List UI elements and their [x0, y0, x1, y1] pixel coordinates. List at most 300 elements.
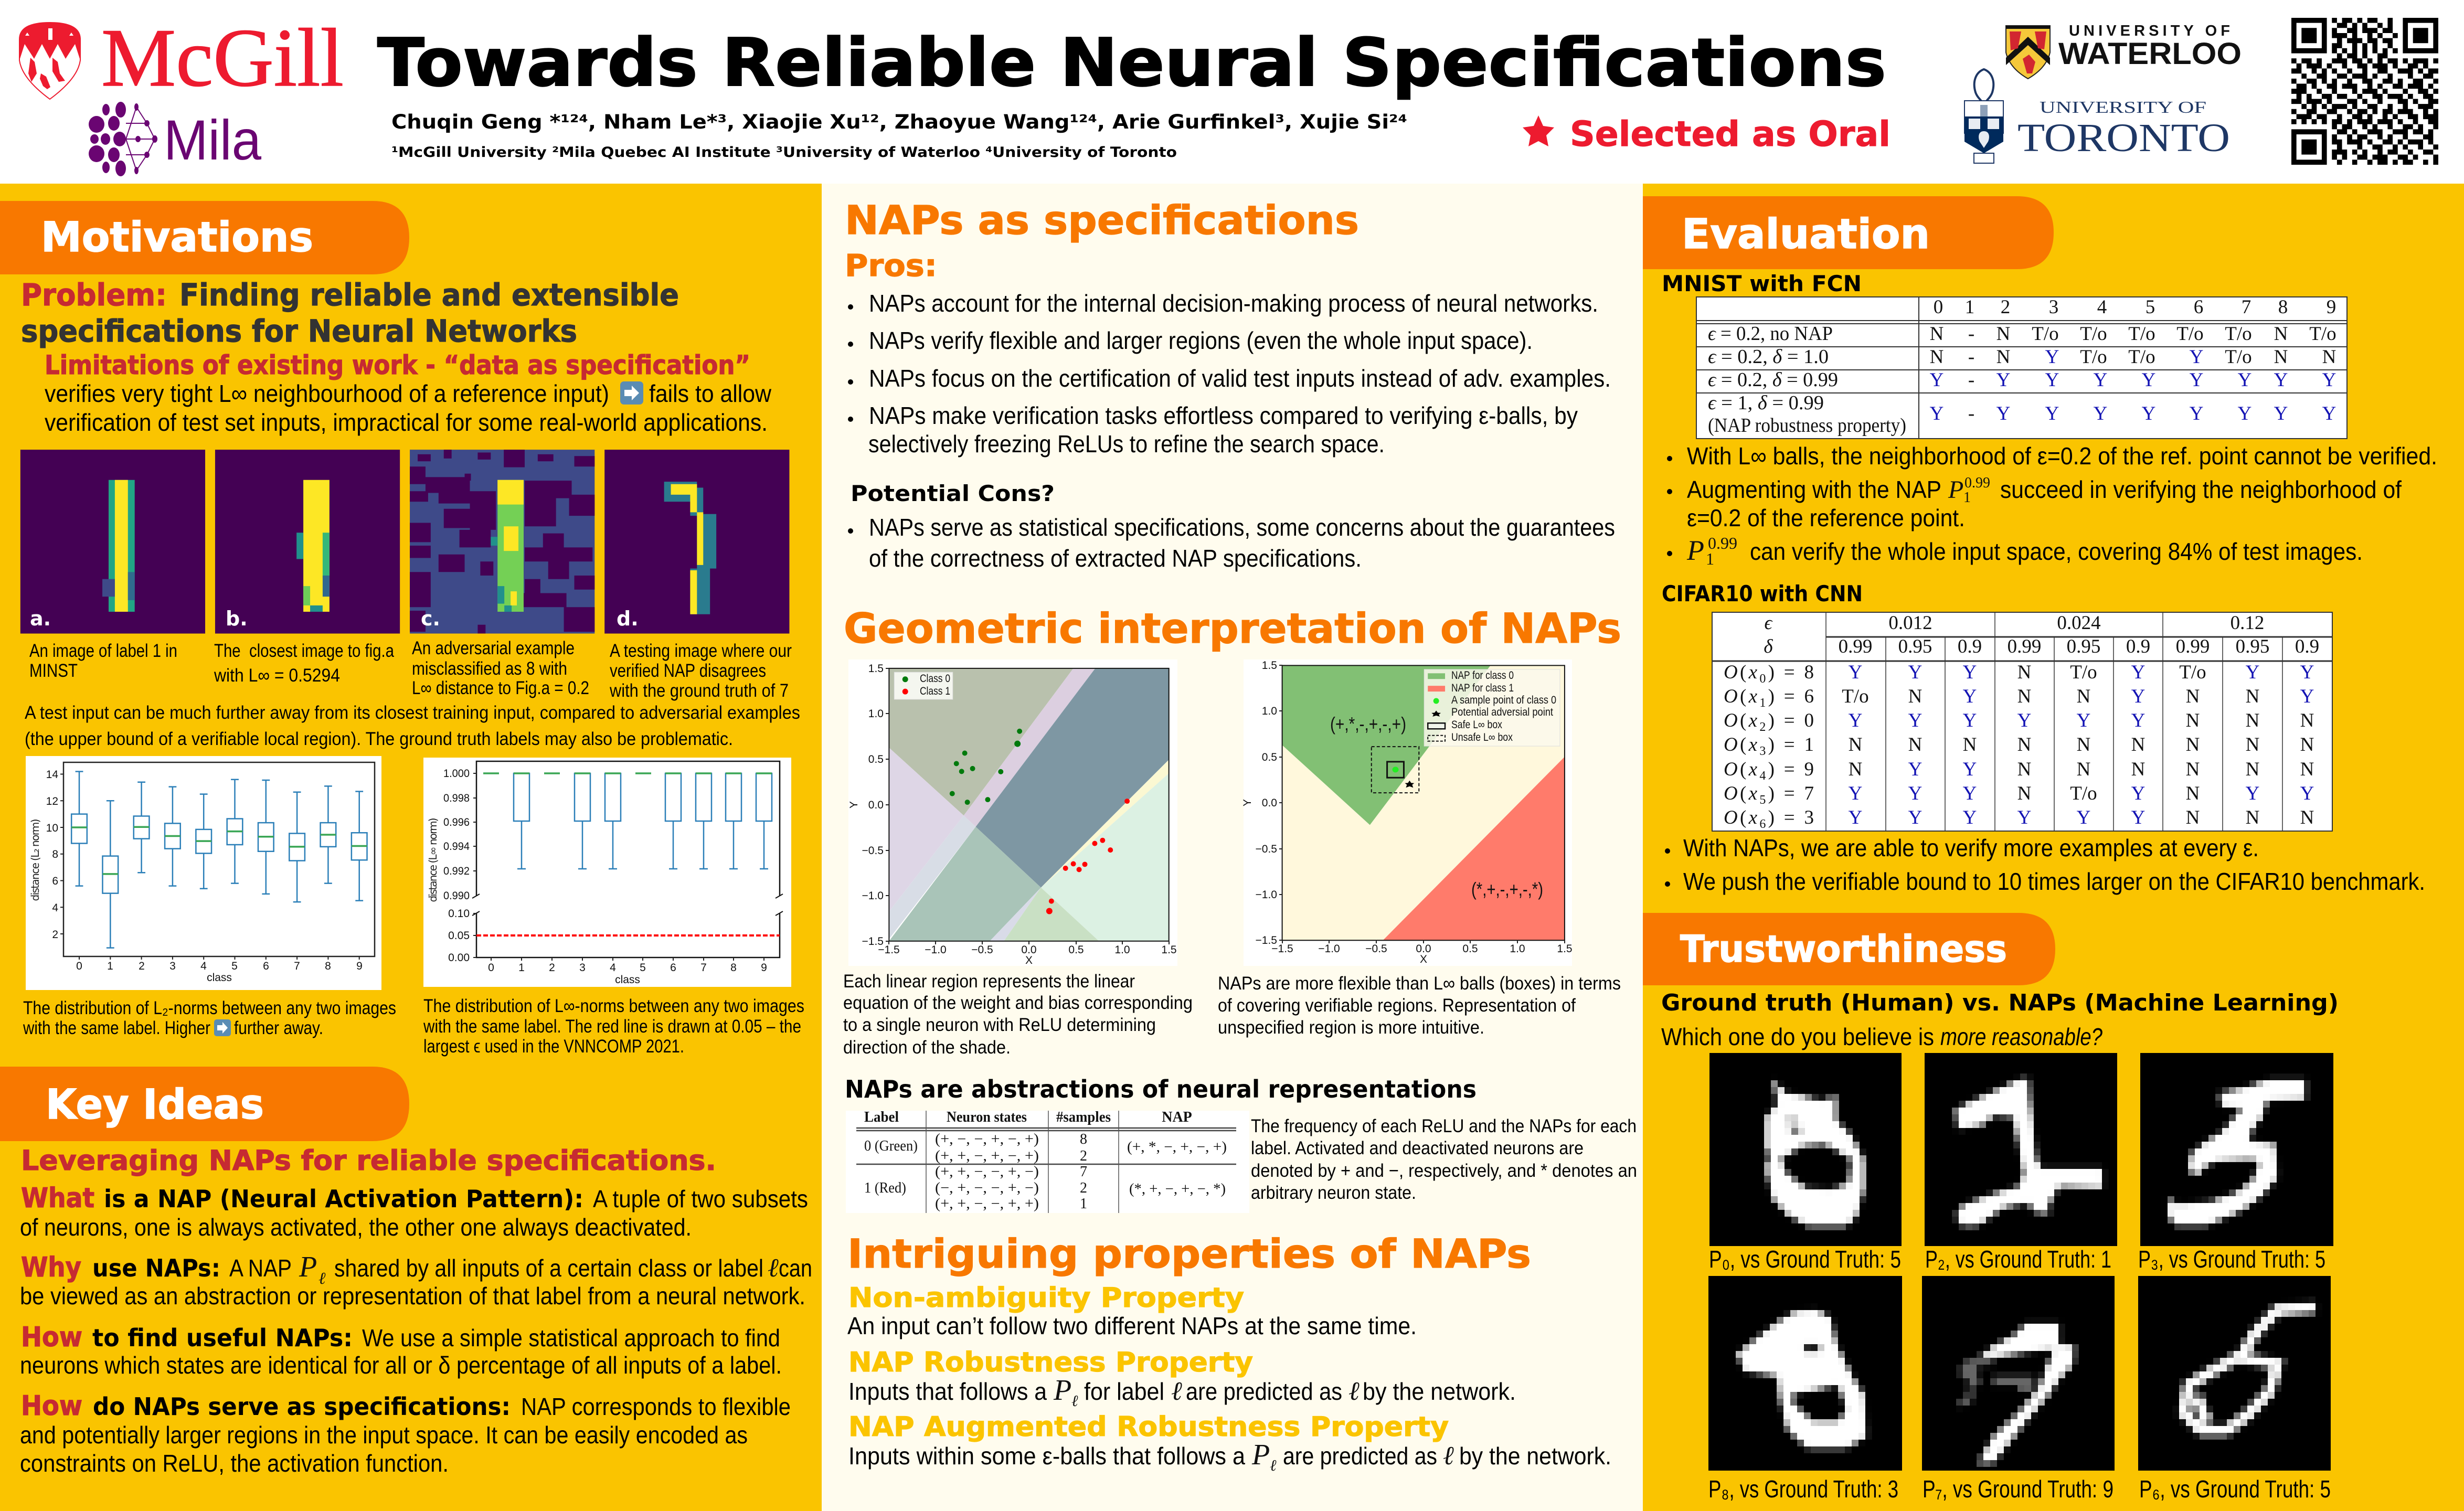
table: CIFAR10 results: O(x	[1724, 807, 1757, 828]
table: NAP frequency: #samples	[1056, 1109, 1111, 1125]
problem statement	[21, 277, 679, 349]
MNIST findings: P	[1948, 476, 1963, 504]
MNIST findings	[1667, 442, 2437, 568]
digit image: P8	[1708, 1276, 1902, 1501]
table: MNIST results: Y	[2238, 403, 2251, 424]
image b: closest training image: b.	[226, 607, 248, 630]
table: MNIST results: ϵ = 0.2, δ = 0.99	[1708, 369, 1838, 391]
table: CIFAR10 results: ϵ	[1765, 612, 1773, 634]
table: MNIST results: ϵ = 0.2, δ = 1.0	[1708, 346, 1829, 368]
logo: Waterloo: UNIVERSITY OF	[2069, 23, 2230, 39]
MNIST findings: ε=0.2 of the reference point.	[1687, 504, 1965, 531]
chart: linear regions plot: 1.0	[868, 708, 884, 720]
property: NAP augmented robustness: are predicted as	[1283, 1442, 1437, 1470]
chart: NAP regions vs boxes plot: −1.5	[1271, 943, 1293, 955]
heading bar: Key Ideas: Key Ideas	[46, 1081, 264, 1129]
table: MNIST results: Y	[2045, 369, 2059, 391]
chart: L2 norm box plot: 8	[52, 848, 58, 860]
problem statement: specifications for Neural Networks	[21, 313, 577, 349]
property: NAP robustness: are predicted as	[1186, 1378, 1342, 1405]
chart: L2 norm box plot: 2	[52, 929, 58, 941]
property: NAP robustness: ℓ	[1171, 1376, 1182, 1406]
table: CIFAR10 results: T/o	[1842, 686, 1869, 707]
table: CIFAR10 results: Y	[2131, 662, 2145, 683]
table: CIFAR10 results: 0.95	[2236, 636, 2269, 657]
captions for images a-d: with L∞ = 0.5294	[214, 665, 340, 686]
captions for images a-d: MINST	[29, 661, 78, 681]
table: CIFAR10 results: O(x	[1724, 783, 1757, 804]
table: CIFAR10 results: ) = 7	[1768, 783, 1814, 804]
chart: NAP regions vs boxes plot: −0.5	[1256, 843, 1277, 855]
chart: L-infinity norm box plot with broken axis: 0.992	[443, 865, 470, 877]
chart: L2 norm box plot: distance (L₂ norm)	[29, 818, 41, 901]
plot captions	[843, 971, 1621, 1058]
plot captions: direction of the shade.	[843, 1037, 1011, 1058]
digit image: P2: P₂, vs Ground Truth: 1	[1925, 1246, 2111, 1273]
why use NAPs	[20, 1251, 812, 1310]
property: NAP augmented robustness: ℓ	[1443, 1441, 1454, 1470]
chart: L-infinity norm box plot with broken axis: 9	[761, 962, 767, 974]
digit image: P7	[1922, 1276, 2115, 1501]
chart: linear regions plot: 1.5	[1161, 944, 1177, 956]
table: MNIST results: Y	[2274, 403, 2288, 424]
limitations text: fails to allow	[649, 380, 772, 407]
property: NAP robustness: P	[1053, 1374, 1071, 1407]
table: CIFAR10 results: N	[2186, 686, 2200, 707]
chart: NAP regions vs boxes plot: (*,+,-,+,-,*)	[1471, 878, 1543, 900]
logo: Mila: Mila	[164, 108, 262, 172]
table: CIFAR10 results: N	[2186, 783, 2200, 804]
chart: L2 norm box plot: 8	[325, 960, 331, 972]
table: CIFAR10 results: N	[2131, 734, 2145, 756]
how to find useful NAPs	[20, 1322, 782, 1379]
chart: linear regions plot: 0.0	[868, 799, 884, 811]
chart: linear regions plot: 0.5	[1068, 944, 1084, 956]
table: CIFAR10 results: N	[2017, 759, 2031, 780]
table: CIFAR10 results: N	[1849, 734, 1862, 756]
heading bar: Trustworthiness: Trustworthiness	[1680, 928, 2007, 971]
why use NAPs: can	[779, 1254, 812, 1282]
pros bullet list: NAPs focus on the certification of valid test inputs instead of adv. examples.	[869, 365, 1611, 392]
property: NAP robustness: by the network.	[1363, 1378, 1516, 1405]
table: NAP frequency: (+, *, −, +, −, +)	[1127, 1139, 1227, 1155]
chart captions: further away.	[234, 1018, 323, 1038]
chart: linear regions plot: Class 0	[920, 673, 950, 685]
what is a NAP: What	[21, 1183, 94, 1214]
table: MNIST results: Y	[2190, 403, 2203, 424]
table: NAP frequency: 8	[1080, 1131, 1087, 1147]
heading: NAPs are abstractions: NAPs are abstractions of neural representations	[845, 1075, 1477, 1103]
table: CIFAR10 results: Y	[1849, 807, 1862, 828]
table: MNIST results: Y	[1930, 403, 1943, 424]
chart: L2 norm box plot: 2	[139, 960, 145, 972]
logo: Toronto: TORONTO	[2017, 116, 2230, 160]
table: MNIST results: ϵ = 0.2, no NAP	[1708, 323, 1833, 345]
table: CIFAR10 results: N	[2246, 807, 2259, 828]
table: CIFAR10 results: Y	[2131, 783, 2145, 804]
table: MNIST results: N	[1930, 323, 1943, 345]
panel: NAPs as specifications	[822, 184, 1643, 1511]
QR code	[2291, 18, 2438, 165]
table: CIFAR10 results: T/o	[2070, 783, 2097, 804]
table: CIFAR10 results: N	[2300, 710, 2314, 731]
MNIST findings: P	[1686, 535, 1704, 566]
chart: L-infinity norm box plot with broken axis: 0.996	[443, 816, 470, 828]
property: NAP robustness	[848, 1347, 1516, 1410]
chart: NAP regions vs boxes plot: −1.0	[1318, 943, 1340, 955]
chart: linear regions plot: 0.0	[1021, 944, 1037, 956]
logo: Waterloo	[2006, 23, 2242, 79]
table: CIFAR10 results: ) = 0	[1768, 710, 1814, 731]
table: CIFAR10 results: δ	[1764, 636, 1773, 657]
property: NAP augmented robustness: Inputs within some ε-balls that follows a	[848, 1442, 1245, 1470]
MNIST findings: succeed in verifying the neighborhood of	[2000, 476, 2402, 503]
table: MNIST results: N	[1930, 346, 1943, 368]
MNIST findings: 1	[1963, 490, 1971, 506]
chart: L-infinity norm box plot with broken axis: distance (L∞ norm)	[427, 817, 439, 902]
table: MNIST results: Y	[2322, 403, 2336, 424]
table: CIFAR10 results: 5	[1759, 793, 1766, 807]
chart: L-infinity norm box plot with broken axis: 1.000	[443, 768, 470, 780]
table: CIFAR10 results: Y	[1963, 686, 1977, 707]
logo: Toronto: UNIVERSITY OF	[2040, 98, 2206, 116]
table: CIFAR10 results: Y	[2017, 710, 2031, 731]
table: MNIST results: Y	[2142, 403, 2155, 424]
table: CIFAR10 results: N	[2017, 686, 2031, 707]
table: CIFAR10 results: 0.9	[2295, 636, 2319, 657]
table: MNIST results: (NAP robustness property)	[1708, 414, 1906, 437]
chart: L2 norm box plot: 10	[46, 822, 58, 834]
table: CIFAR10 results: N	[2246, 710, 2259, 731]
MNIST findings: 0.99	[1708, 534, 1737, 552]
chart: L2 norm box plot: 6	[263, 960, 269, 972]
table: MNIST results: Y	[2045, 346, 2059, 368]
subheading: ground truth vs NAPs: Ground truth (Human) vs. NAPs (Machine Learning)	[1661, 989, 2339, 1016]
table: CIFAR10 results: Y	[1963, 710, 1977, 731]
heading bar: Motivations	[0, 201, 409, 274]
table: MNIST results: 9	[2327, 296, 2336, 318]
how do NAPs serve as specifications: constraints on ReLU, the activation function.	[20, 1450, 449, 1477]
table: MNIST results: Y	[2142, 369, 2155, 391]
table: NAP frequency: (+, +, −, −, +, −)	[935, 1164, 1039, 1180]
table: CIFAR10 results: Y	[2017, 807, 2031, 828]
image c: adversarial example	[410, 450, 594, 634]
table: CIFAR10 results: 0.12	[2231, 612, 2264, 634]
table: NAP frequency: 2	[1080, 1148, 1087, 1164]
digit image: P3	[2140, 1053, 2333, 1271]
chart: L2 norm box plot: 7	[294, 960, 300, 972]
chart: L2 norm box plot: 1	[107, 960, 113, 972]
chart: L-infinity norm box plot with broken axis: 2	[549, 962, 555, 974]
table: MNIST results: Y	[2045, 403, 2059, 424]
table: CIFAR10 results: 0.95	[1898, 636, 1932, 657]
table: CIFAR10 results: Y	[2246, 662, 2259, 683]
MNIST findings: can verify the whole input space, covering 84% of test images.	[1750, 538, 2363, 565]
table: CIFAR10 results: N	[2186, 807, 2200, 828]
captions for images a-d: An adversarial example	[412, 638, 575, 658]
limitations text: verification of test set inputs, impractical for some real-world applications.	[45, 409, 768, 436]
plot captions: to a single neuron with ReLU determining	[843, 1015, 1156, 1035]
chart: linear regions plot: −1.5	[862, 935, 884, 948]
table: CIFAR10 results: 0.9	[2126, 636, 2150, 657]
authors: Chuqin Geng *¹²⁴, Nham Le*³, Xiaojie Xu¹², Zhaoyue Wang¹²⁴, Arie Gurfinkel³, Xujie Si²⁴	[391, 111, 1407, 133]
table: MNIST results: T/o	[2080, 346, 2107, 368]
digit image: P0: P₀, vs Ground Truth: 5	[1709, 1246, 1901, 1273]
captions for images a-d	[29, 638, 792, 701]
chart: NAP regions vs boxes plot: A sample point of class 0	[1451, 694, 1556, 706]
table: CIFAR10 results: N	[2017, 734, 2031, 756]
table: MNIST results: 3	[2049, 296, 2058, 318]
logo: Mila	[89, 102, 262, 176]
chart captions	[23, 996, 804, 1057]
table: MNIST results: Y	[2238, 369, 2251, 391]
table: NAP frequency	[846, 1109, 1249, 1213]
table: CIFAR10 results: Y	[1963, 662, 1977, 683]
image a: MNIST digit 1: a.	[30, 607, 51, 630]
chart: NAP regions vs boxes plot: −1.5	[1256, 934, 1277, 946]
table: CIFAR10 results: N	[2131, 759, 2145, 780]
table: MNIST results: T/o	[2225, 346, 2252, 368]
chart: NAP regions vs boxes plot: NAP for class 0	[1451, 669, 1514, 682]
image a: MNIST digit 1	[20, 450, 205, 634]
table: CIFAR10 results: 0.95	[2067, 636, 2100, 657]
heading: CIFAR10 with CNN: CIFAR10 with CNN	[1662, 581, 1863, 606]
table: MNIST results: Y	[2094, 403, 2107, 424]
table: CIFAR10 results: 2	[1759, 720, 1766, 734]
table: CIFAR10 results: N	[2077, 686, 2090, 707]
table: CIFAR10 results: Y	[2246, 783, 2259, 804]
chart: NAP regions vs boxes plot: 1.0	[1510, 943, 1525, 955]
table: MNIST results: -	[1968, 323, 1974, 345]
table: NAP frequency: 0 (Green)	[864, 1138, 918, 1154]
image d: hooked digit 7	[604, 450, 789, 634]
chart: linear regions plot	[848, 659, 1177, 966]
logo: Waterloo: WATERLOO	[2058, 37, 2242, 71]
chart captions: with the same label. Higher	[23, 1018, 210, 1038]
chart: linear regions plot: Class 1	[920, 685, 950, 697]
why use NAPs: ℓ	[768, 1253, 779, 1282]
cons bullet	[848, 514, 1615, 572]
table description: denoted by + and −, respectively, and * denotes an	[1251, 1161, 1637, 1181]
property: non-ambiguity: An input can’t follow two different NAPs at the same time.	[847, 1312, 1417, 1339]
captions for images a-d: The closest image to fig.a	[214, 641, 394, 661]
icon: star	[1523, 115, 1554, 146]
heading: Potential Cons: Potential Cons?	[851, 481, 1055, 506]
chart: L2 norm box plot: 3	[169, 960, 176, 972]
MNIST findings: 1	[1706, 549, 1714, 568]
captions for images a-d: L∞ distance to Fig.a = 0.2	[412, 678, 589, 698]
chart: L2 norm box plot: 0	[76, 960, 82, 972]
table: CIFAR10 results: N	[2246, 734, 2259, 756]
table: CIFAR10 results: 1	[1759, 696, 1766, 710]
red reference line	[476, 934, 780, 937]
cons bullet: NAPs serve as statistical specifications, some concerns about the guarantees	[869, 514, 1615, 541]
table: MNIST results: 1	[1965, 296, 1974, 318]
table: CIFAR10 results: Y	[2300, 686, 2314, 707]
chart: L-infinity norm box plot with broken axis: 0.00	[448, 952, 470, 964]
captions for images a-d: with the ground truth of 7	[609, 680, 789, 701]
table: CIFAR10 results: N	[2017, 662, 2031, 683]
table: CIFAR10 results: Y	[2131, 807, 2145, 828]
digit image: P8: P₈, vs Ground Truth: 3	[1708, 1475, 1898, 1503]
table: CIFAR10 results: Y	[1849, 710, 1862, 731]
table: MNIST results: Y	[2190, 369, 2203, 391]
chart: NAP regions vs boxes plot: 1.5	[1262, 659, 1277, 672]
table: MNIST results: Y	[1996, 369, 2010, 391]
chart: NAP regions vs boxes plot	[1241, 659, 1573, 966]
table: CIFAR10 results: 3	[1759, 744, 1766, 758]
chart: NAP regions vs boxes plot: −1.0	[1256, 889, 1277, 901]
table: MNIST results: 6	[2194, 296, 2203, 318]
plot captions: equation of the weight and bias corresponding	[843, 993, 1193, 1013]
MNIST findings: 0.99	[1964, 475, 1990, 491]
chart: NAP regions vs boxes plot: −0.5	[1365, 943, 1387, 955]
pros bullet list: selectively freezing ReLUs to refine the search space.	[868, 430, 1385, 457]
title: Towards Reliable Neural Specifications	[377, 24, 1886, 101]
table: MNIST results: T/o	[2128, 323, 2155, 345]
key ideas subtitle: Leveraging NAPs for reliable specifications.	[21, 1145, 716, 1177]
property: NAP augmented robustness: ℓ	[1270, 1457, 1277, 1474]
chart: L2 norm box plot: 5	[231, 960, 238, 972]
table description: The frequency of each ReLU and the NAPs for each	[1251, 1116, 1637, 1136]
digit image: P6: P₆, vs Ground Truth: 5	[2139, 1475, 2331, 1503]
table: CIFAR10 results: Y	[2077, 710, 2090, 731]
chart: L2 norm box plot: 6	[52, 875, 58, 887]
table: CIFAR10 results: 0	[1759, 672, 1766, 686]
chart: NAP regions vs boxes plot: 1.0	[1262, 705, 1277, 717]
chart: L-infinity norm box plot with broken axis: 3	[579, 962, 586, 974]
table: CIFAR10 results: Y	[1908, 759, 1922, 780]
table: CIFAR10 results: 0.99	[1839, 636, 1872, 657]
table: MNIST results: Y	[1996, 403, 2010, 424]
table: NAP frequency: 1	[1080, 1196, 1087, 1212]
heading bar: Evaluation	[1643, 196, 2054, 269]
chart: L-infinity norm box plot with broken axis: 1	[518, 962, 525, 974]
chart: L2 norm box plot: 12	[46, 795, 58, 807]
table: MNIST results: Y	[2094, 369, 2107, 391]
chart: NAP regions vs boxes plot: Potential adversial point	[1451, 706, 1553, 718]
MNIST findings: Augmenting with the NAP	[1687, 476, 1941, 503]
table: MNIST results: T/o	[2309, 323, 2336, 345]
table: CIFAR10 results: Y	[1963, 783, 1977, 804]
table: CIFAR10 results: N	[2077, 759, 2090, 780]
panel: Key Ideas	[0, 1067, 822, 1511]
plot captions: Each linear region represents the linear	[843, 971, 1135, 992]
table: NAP frequency: Neuron states	[947, 1109, 1027, 1125]
table: MNIST results: 8	[2278, 296, 2288, 318]
chart: NAP regions vs boxes plot: 0.0	[1262, 797, 1277, 809]
explanatory text: (the upper bound of a verifiable local region). The ground truth labels may also be problematic.	[25, 729, 733, 749]
chart: NAP regions vs boxes plot: NAP for class 1	[1451, 682, 1514, 694]
problem statement: Finding reliable and extensible	[179, 277, 679, 313]
table: MNIST results: Y	[1930, 369, 1943, 391]
table: MNIST results: ϵ = 1, δ = 0.99	[1708, 392, 1824, 414]
chart: L-infinity norm box plot with broken axis: 0.998	[443, 792, 470, 804]
table: MNIST results: T/o	[2176, 323, 2204, 345]
table: NAP frequency: (+, +, −, −, +, +)	[935, 1196, 1039, 1212]
table: MNIST results: T/o	[2225, 323, 2252, 345]
property: NAP augmented robustness: by the network.	[1459, 1442, 1611, 1470]
chart: linear regions plot: 1.0	[1114, 944, 1130, 956]
chart captions: The distribution of L∞-norms between any two images	[423, 996, 804, 1016]
why use NAPs: Why	[21, 1252, 81, 1283]
table: CIFAR10 results: Y	[2077, 807, 2090, 828]
chart: linear regions plot: 1.5	[868, 663, 884, 675]
table: CIFAR10 results: N	[2300, 734, 2314, 756]
heading: Geometric interpretation: Geometric interpretation of NAPs	[844, 605, 1621, 653]
CIFAR10 findings	[1665, 834, 2425, 895]
chart: NAP regions vs boxes plot: X	[1420, 953, 1427, 965]
logo: McGill: McGill	[101, 12, 344, 104]
chart: NAP regions vs boxes plot: 0.5	[1262, 751, 1277, 763]
how to find useful NAPs: neurons which states are identical for all or δ percentage of all inputs of a label.	[20, 1352, 782, 1379]
table: CIFAR10 results: N	[2300, 807, 2314, 828]
chart: L-infinity norm box plot with broken axis: 8	[730, 962, 737, 974]
table: CIFAR10 results: Y	[1849, 662, 1862, 683]
cons bullet: of the correctness of extracted NAP specifications.	[869, 545, 1362, 572]
table: MNIST results: -	[1968, 403, 1974, 424]
question: more reasonable?	[1940, 1023, 2102, 1050]
property: non-ambiguity	[847, 1282, 1417, 1339]
chart: linear regions plot: X	[1025, 954, 1033, 966]
image b: closest training image	[215, 450, 400, 634]
digit image: P3: P₃, vs Ground Truth: 5	[2138, 1246, 2325, 1273]
captions for images a-d: misclassified as 8 with	[412, 658, 567, 679]
table: CIFAR10 results: O(x	[1724, 759, 1757, 780]
table: MNIST results: N	[2274, 346, 2288, 368]
how to find useful NAPs: to find useful NAPs:	[92, 1324, 353, 1352]
chart: L-infinity norm box plot with broken axis: 6	[670, 962, 676, 974]
table: MNIST results: 2	[2001, 296, 2010, 318]
table: MNIST results: -	[1968, 369, 1974, 391]
property: NAP robustness: for label	[1084, 1378, 1164, 1405]
table description	[1251, 1116, 1637, 1203]
digit image: P0	[1709, 1053, 1902, 1271]
table: MNIST results: 7	[2242, 296, 2251, 318]
limitations text: verifies very tight L∞ neighbourhood of a reference input)	[45, 380, 609, 407]
heading bar: Motivations: Motivations	[41, 214, 313, 261]
table: CIFAR10 results: N	[2246, 686, 2259, 707]
heading bar: Trustworthiness	[1643, 913, 2055, 985]
table: CIFAR10 results: 0.99	[2008, 636, 2041, 657]
table: CIFAR10 results: Y	[1908, 710, 1922, 731]
chart: linear regions plot: −0.5	[971, 944, 993, 956]
property: NAP augmented robustness: P	[1251, 1439, 1270, 1471]
property: NAP augmented robustness	[848, 1411, 1611, 1474]
chart: linear regions plot: Y	[848, 801, 860, 808]
table: CIFAR10 results: N	[2017, 783, 2031, 804]
how do NAPs serve as specifications: and potentially larger regions in the input space. It can be easily encoded as	[20, 1421, 748, 1449]
explanatory text	[25, 703, 800, 749]
pros bullet list: NAPs verify flexible and larger regions (even the whole input space).	[869, 327, 1533, 354]
table: MNIST results: Y	[2322, 369, 2336, 391]
chart: L-infinity norm box plot with broken axis: 0.990	[443, 890, 470, 902]
table: CIFAR10 results: N	[2186, 759, 2200, 780]
table: MNIST results: N	[1996, 346, 2010, 368]
table: CIFAR10 results: 6	[1759, 817, 1766, 831]
heading bar: Key Ideas	[0, 1067, 409, 1141]
chart: NAP regions vs boxes plot: 1.5	[1557, 943, 1573, 955]
what is a NAP: of neurons, one is always activated, the other one always deactivated.	[20, 1214, 692, 1241]
chart: NAP regions vs boxes plot: Unsafe L∞ box	[1451, 731, 1513, 743]
table: NAP frequency: Label	[864, 1109, 899, 1125]
heading: NAPs as specifications: NAPs as specifications	[845, 197, 1359, 243]
table: NAP frequency: (+, +, −, +, −, +)	[935, 1148, 1039, 1164]
how do NAPs serve as specifications: do NAPs serve as specifications:	[93, 1392, 511, 1421]
digit image: P2	[1925, 1053, 2117, 1271]
question: Which one do you believe is	[1661, 1023, 1934, 1050]
why use NAPs: use NAPs:	[92, 1254, 220, 1282]
